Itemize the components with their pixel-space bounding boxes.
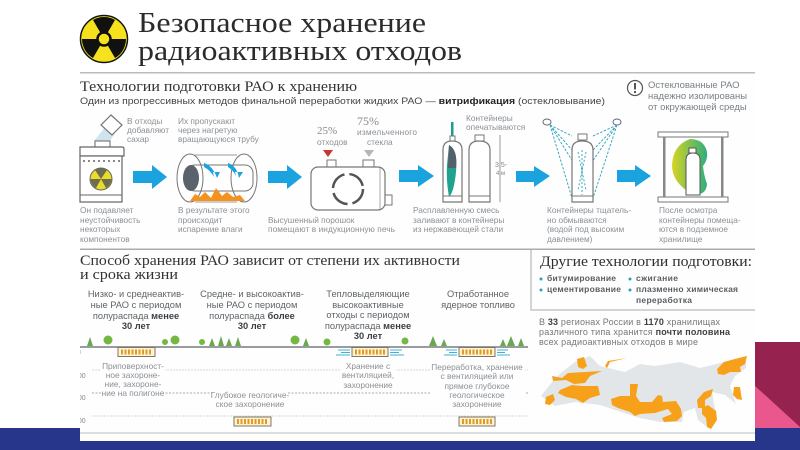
callout: vitrified waste isolated: Остеклованные РАО (648, 80, 740, 91)
step 5 text: washing (547, 205, 631, 244)
depth labels (80, 350, 86, 423)
step 4 text: molten mix: Расплавленную смесь (413, 205, 499, 215)
step 3 labels: proportions: отходов (317, 137, 348, 147)
step 3 text: furnace: помещают в индукционную печь (268, 224, 395, 234)
step 4: steel containers: 4 м (496, 171, 505, 177)
step 2 text: evaporation: происходит (178, 215, 222, 225)
callout: vitrified waste isolated: от окружающей среды (648, 102, 747, 113)
step 2: heated rotating tube (177, 154, 257, 202)
column 3 heading: Тепловыделяющие (326, 289, 410, 299)
step 5 text: washing: давлением) (547, 234, 593, 244)
step 6 text: storage: ются в подземное (659, 224, 728, 234)
step 1 text: instability (80, 205, 140, 244)
column 4 storage text: геологическое (449, 390, 505, 400)
column 4 heading (441, 289, 515, 310)
step 6 text: storage: контейнеры помеща- (659, 215, 741, 225)
section heading: preparation technologies: Технологии подготовки РАО к хранению (80, 79, 357, 95)
step 1 text: sugar (127, 116, 169, 144)
depth labels: 400 (74, 395, 86, 402)
step 3 labels: proportions: 25% (317, 125, 337, 137)
list of other technologies: битумирование (547, 273, 616, 283)
step 2 text: heated tube (178, 116, 260, 144)
column 1 storage text (101, 360, 165, 398)
arrow 4 (516, 166, 550, 187)
depth labels: м (76, 349, 81, 356)
step 2 text: evaporation: В результате этого (178, 205, 250, 215)
heading: other technologies: Другие технологии подготовки: (540, 254, 752, 270)
column 2 storage text (211, 388, 289, 409)
container: column 2 (234, 417, 271, 426)
arrow 1 (133, 165, 167, 189)
column 4 storage text: с вентиляцией или (441, 371, 514, 381)
text: storage in Russia: В 33 регионах России в 1170 хранилищах (539, 317, 720, 327)
column 3 heading: полураспада менее (325, 321, 411, 331)
step 2 text: evaporation (178, 205, 250, 234)
step 6 text: storage: хранилище (659, 234, 703, 244)
column 2 heading: полураспада более (209, 311, 295, 321)
arrow 5 (617, 165, 651, 187)
step 1 text: sugar: сахар (127, 134, 149, 144)
column 1 storage text: ние, захороне- (105, 379, 162, 389)
container: column 1 (118, 348, 155, 356)
step 3 labels: proportions (317, 114, 417, 157)
section heading: storage method (80, 253, 460, 283)
step 4 text: sealing (466, 113, 525, 132)
column 4 storage text: Переработка, хранение (431, 362, 523, 372)
step 1 text: instability: некоторых (80, 224, 121, 234)
depth grid (80, 347, 755, 433)
step 4 text: sealing: Контейнеры (466, 113, 513, 123)
step 1 text: instability: неустойчивость (80, 215, 140, 225)
column 1 heading: ные РАО с периодом (91, 300, 181, 310)
column 3 storage text: Хранение с (346, 361, 390, 371)
title: радиоактивных отходов (138, 36, 462, 67)
step 6 text: storage: После осмотра (659, 205, 718, 215)
slide decoration: corner shapes (0, 342, 800, 450)
column 2 storage text: ское захоронение (216, 399, 285, 409)
column 1 storage text: Приповерхност- (102, 361, 164, 371)
step 2 text: heated tube: вращающуюся трубу (178, 134, 260, 144)
step 4: steel containers (443, 122, 508, 202)
step 6 text: storage (659, 205, 741, 244)
column 3 heading: отходы с периодом (326, 310, 410, 320)
step 1 text: sugar: добавляют (127, 125, 169, 135)
column 2 heading (200, 289, 304, 331)
radiation icon (80, 16, 128, 62)
column 3 heading: 30 лет (354, 331, 383, 341)
arrow 3 (399, 165, 434, 187)
step 5: container washing (543, 119, 621, 202)
panel: infographic background (80, 72, 755, 441)
trees along the ground line (87, 336, 524, 346)
column 1 storage text: ное захороне- (106, 370, 160, 380)
list of other technologies: цементирование (547, 284, 621, 294)
section heading: storage method: Способ хранения РАО зависит от степени их активности (80, 253, 460, 269)
container: column 3 with ventilation (336, 348, 404, 356)
column 4 heading: Отработанное (447, 289, 509, 299)
step 4 text: sealing: опечатываются (466, 122, 525, 132)
step 2 text: heated tube: через нагретую (178, 125, 238, 135)
divider: middle (80, 248, 755, 250)
column 1 heading: полураспада менее (93, 311, 179, 321)
list of other technologies (540, 273, 738, 305)
text: storage in Russia: различного типа хранится почти половина (539, 327, 731, 337)
column 3 storage text: захоронение (343, 380, 393, 390)
container: column 4 bottom (459, 417, 495, 426)
step 3 text: furnace: Высушенный порошок (268, 215, 355, 225)
text: storage in Russia (539, 317, 731, 347)
arrow 2 (268, 165, 302, 189)
step 1 text: instability: компонентов (80, 234, 130, 244)
step 3 labels: proportions: стекла (367, 137, 393, 147)
callout: vitrified waste isolated (628, 80, 747, 113)
text: storage in Russia: всех радиоактивных отходов в мире (539, 337, 698, 347)
step 3 labels: proportions: 75% (357, 114, 379, 128)
step 3 labels: proportions: измельченного (357, 127, 417, 137)
column 1 storage text: ние на полигоне (102, 388, 165, 398)
column 4 storage text: прямое глубокое (444, 381, 510, 391)
step 1 text: sugar: В отходы (127, 116, 162, 126)
step 4 text: molten mix: из нержавеющей стали (413, 224, 503, 234)
list of other technologies: переработка (636, 295, 692, 305)
step 1: jar with sugar (80, 115, 124, 202)
title: Безопасное хранение (138, 8, 426, 39)
step 2 text: heated tube: Их пропускают (178, 116, 235, 126)
depth labels: 600 (74, 418, 86, 425)
column 3 storage text: вентиляцией, (342, 370, 394, 380)
step 1 text: instability: Он подавляет (80, 205, 134, 215)
column 4 storage text (430, 362, 525, 409)
column 4 heading: ядерное топливо (441, 300, 515, 310)
column 2 heading: ные РАО с периодом (207, 300, 297, 310)
section heading: storage method: и срока жизни (80, 267, 178, 283)
step 4: steel containers: 3,5- (495, 162, 508, 169)
callout: vitrified waste isolated: надежно изолированы (648, 91, 747, 102)
section subtitle: Один из прогрессивных методов финальной переработки жидких РАО — витрификация (остекловывание) (80, 96, 605, 106)
step 4 text: molten mix: заливают в контейнеры (413, 215, 504, 225)
container: column 4 top with ventilation (444, 348, 510, 356)
step 3: induction furnace (311, 160, 392, 210)
column 2 storage text: Глубокое геологиче- (211, 390, 289, 400)
column 3 heading (325, 289, 411, 341)
list of other technologies: сжигание (636, 273, 678, 283)
step 5 text: washing: Контейнеры тщатель- (547, 205, 631, 215)
column 3 storage text (340, 361, 396, 390)
title (138, 8, 462, 67)
column 3 heading: высокоактивные (332, 300, 404, 310)
column 1 heading: Низко- и среднеактив- (88, 289, 184, 299)
column 2 heading: Средне- и высокоактив- (200, 289, 304, 299)
panel: other technologies frame (531, 250, 755, 310)
divider: top (80, 72, 755, 74)
step 6: underground storage (658, 132, 728, 202)
depth labels: 200 (74, 373, 86, 380)
map of Russia (541, 356, 747, 429)
column 4 storage text: захоронение (452, 399, 502, 409)
column 1 heading (88, 289, 184, 331)
column 1 heading: 30 лет (122, 321, 151, 331)
column 2 heading: 30 лет (238, 321, 267, 331)
list of other technologies: плазменно химическая (636, 284, 738, 294)
step 5 text: washing: но обмываются (547, 215, 607, 225)
step 2 text: evaporation: испарение влаги (178, 224, 243, 234)
step 5 text: washing: (водой под высоким (547, 224, 624, 234)
step 4 text: molten mix (413, 205, 504, 234)
step 3 text: furnace (268, 215, 395, 234)
